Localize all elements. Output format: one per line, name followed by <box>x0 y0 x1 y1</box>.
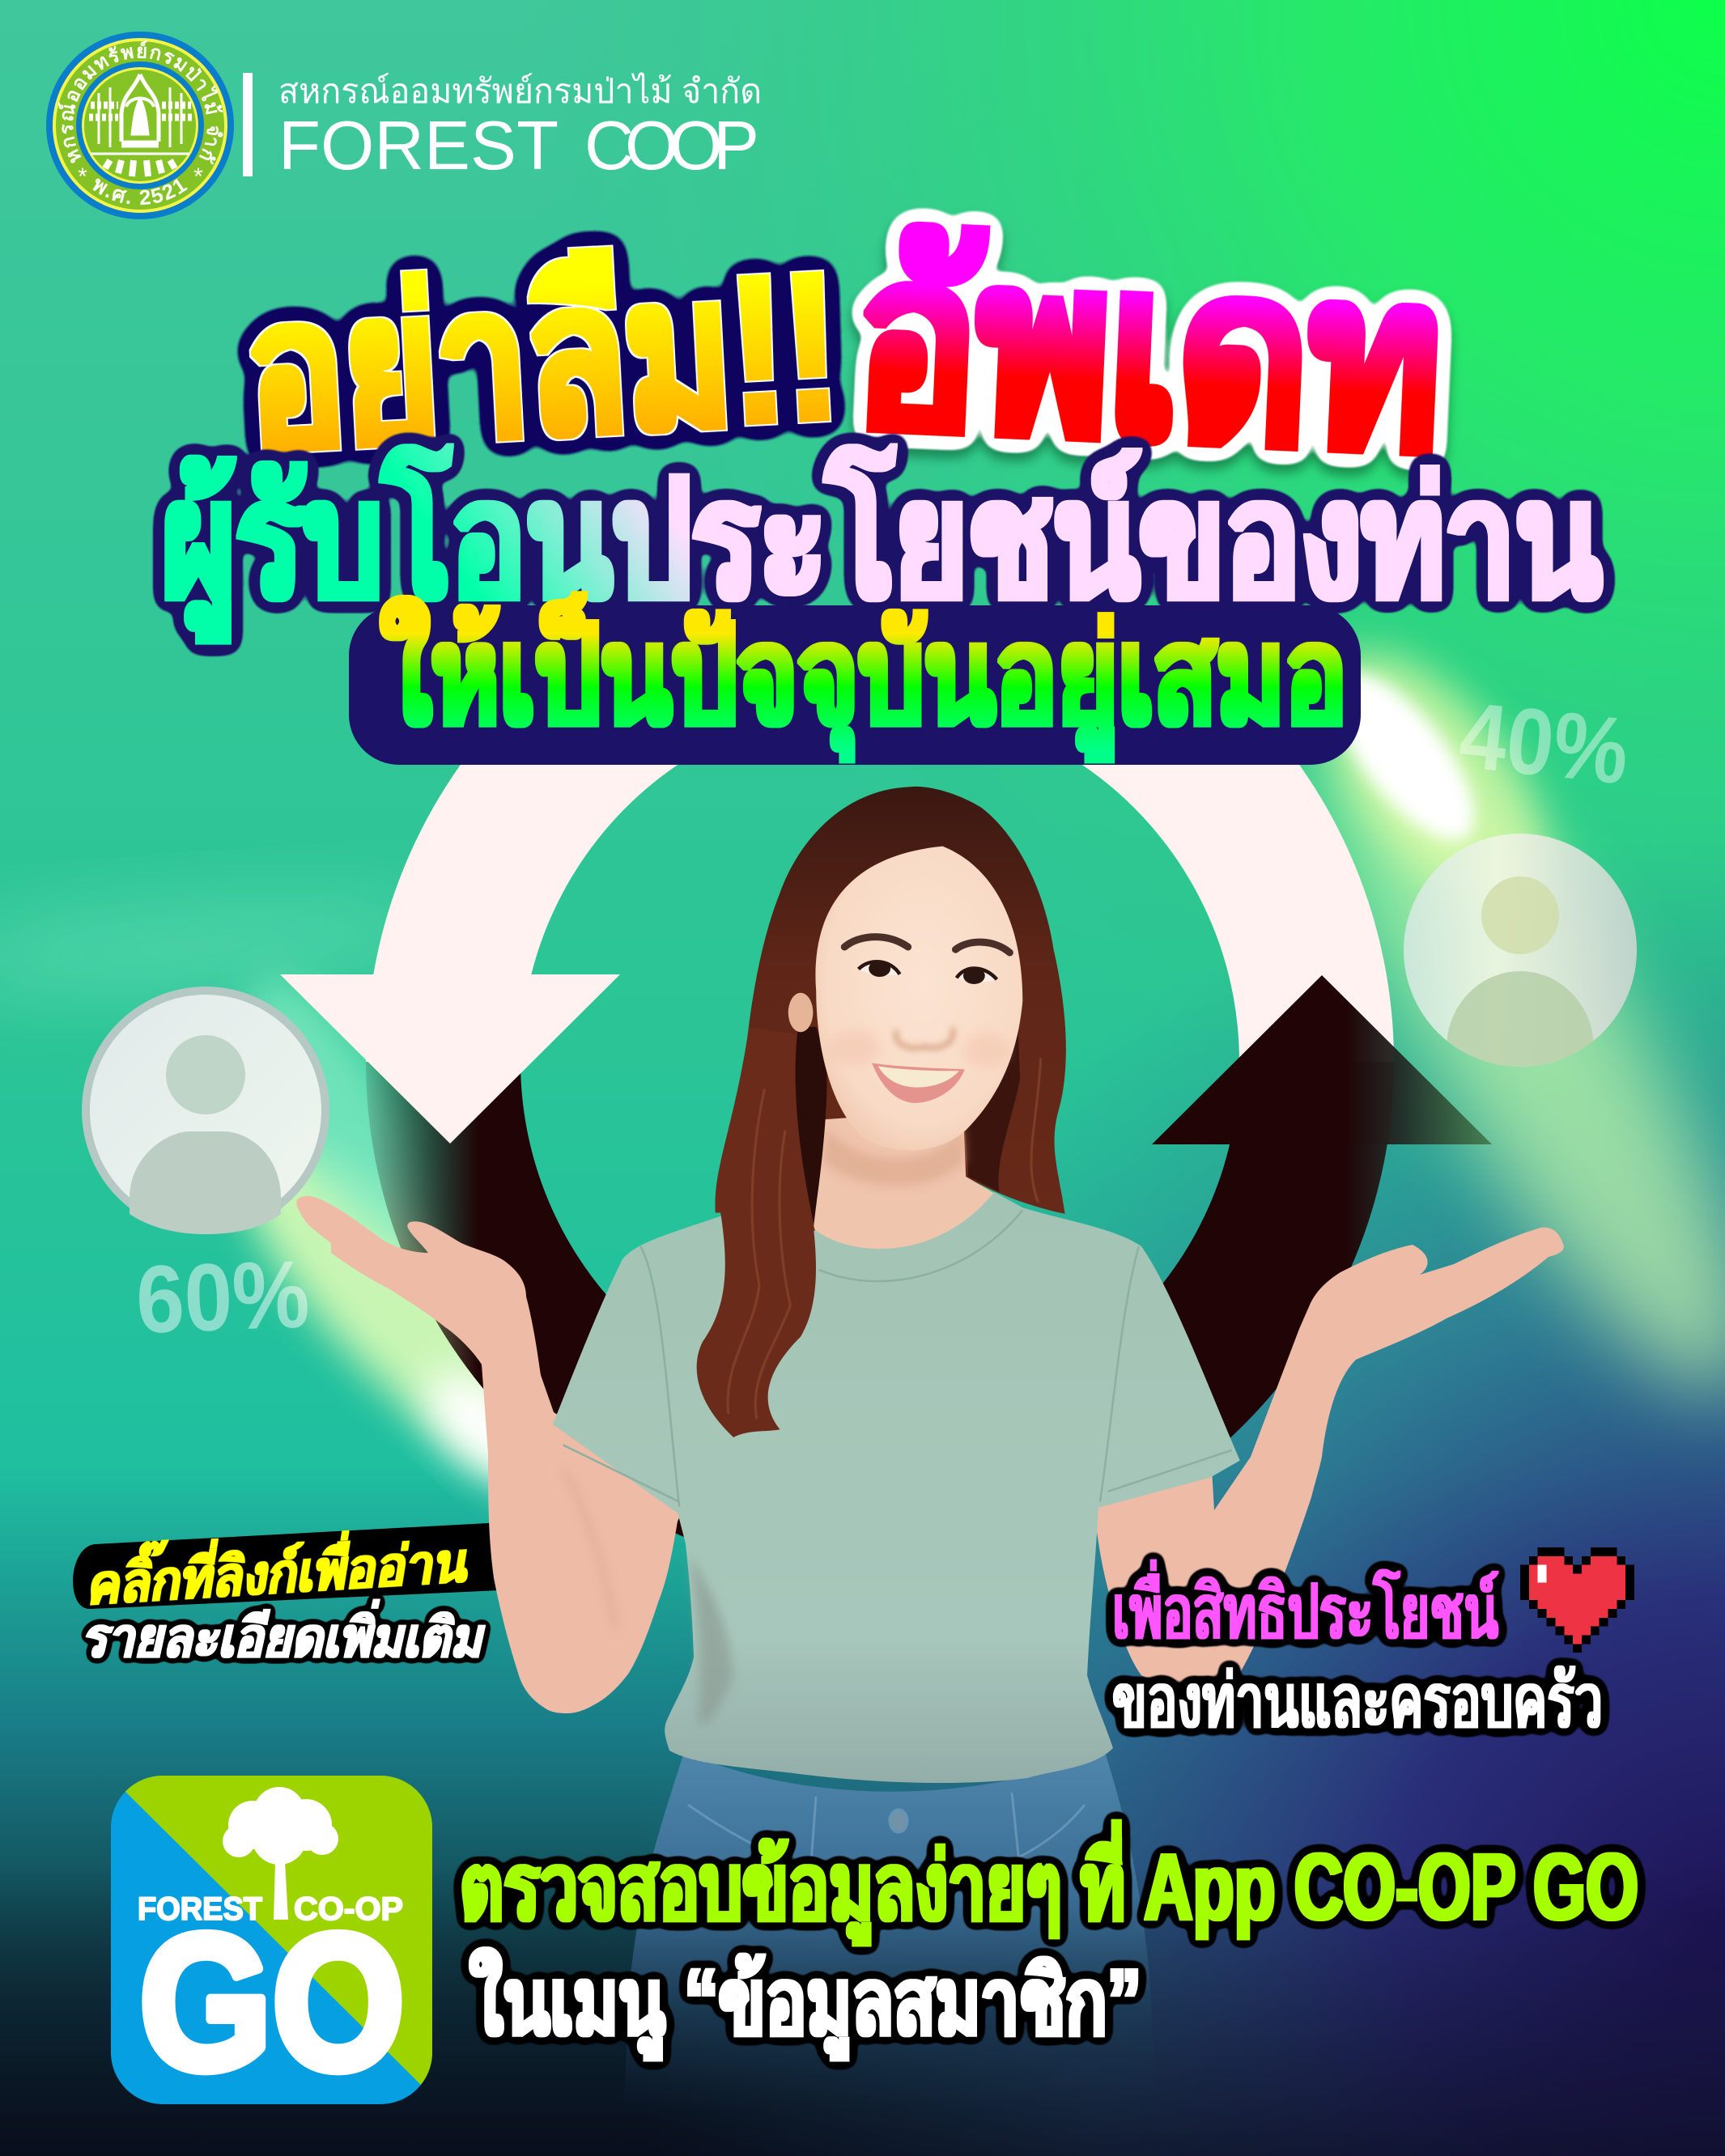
icon label go: GO <box>139 1895 405 2110</box>
avatar left <box>82 987 329 1234</box>
face <box>815 847 1022 1150</box>
arrowhead down <box>280 974 620 1144</box>
light beams <box>0 615 1725 1516</box>
dark lower half of ring <box>366 1062 1394 1576</box>
jeans <box>623 1752 1158 2112</box>
person <box>296 787 1564 2112</box>
front hair lock <box>697 1027 823 1437</box>
pale upper half of ring <box>366 765 1394 1062</box>
logo: * <box>78 163 87 190</box>
ear <box>788 993 813 1032</box>
icon label forest: FOREST <box>138 1891 262 1927</box>
hair strands <box>728 1058 1041 1420</box>
shirt waist shading <box>690 1553 733 1725</box>
organisation name: สหกรณ์ออมทรัพย์กรมป่าไม้ จำกัด <box>278 72 762 110</box>
right arm and hand <box>1093 1228 1564 1684</box>
call to action line 2: ในเมนู “ข้อมูลสมาชิก” <box>469 1947 1141 2061</box>
avatar right <box>1404 834 1637 1067</box>
forest coop wordmark: COOP <box>584 108 759 185</box>
percent 40: 40% <box>1455 682 1634 804</box>
nose <box>896 1029 954 1048</box>
mouth <box>872 1063 965 1103</box>
icon: pixel heart <box>1520 1547 1634 1653</box>
headline pill <box>349 605 1361 765</box>
temple emblem <box>89 74 193 176</box>
circular arrows <box>280 765 1492 1537</box>
arrowhead up <box>1152 975 1492 1144</box>
forest coop wordmark: FOREST <box>278 108 559 185</box>
icon label coop: CO-OP <box>294 1891 403 1927</box>
headline: update: อัพเดท <box>851 198 1447 505</box>
side note: click link: คลิ๊กที่ลิงก์เพื่ออ่าน <box>83 1522 469 1616</box>
hair shadow <box>796 1027 827 1223</box>
cheeks <box>829 1029 1009 1068</box>
left arm and hand <box>296 1196 688 1713</box>
headline: remember: อย่าลืม!! <box>241 227 843 494</box>
logo divider <box>243 73 253 176</box>
app icon <box>109 1776 432 2110</box>
icon: tree <box>223 1787 338 1920</box>
side note pill <box>73 1522 518 1609</box>
neck shadow <box>822 1125 965 1186</box>
logo: * <box>193 163 203 190</box>
eyes <box>858 961 996 984</box>
headline: always current: ให้เป็นปัจจุบันอยู่เสมอ <box>380 592 1347 762</box>
logo <box>46 32 234 219</box>
t-shirt collar and sleeve seams <box>563 1210 1232 1507</box>
jeans waistband details <box>688 1793 1085 1886</box>
neck <box>811 1110 994 1250</box>
percent 60: 60% <box>134 1241 311 1354</box>
hair shadow right of neck <box>963 1016 1020 1192</box>
side note: more details: รายละเอียดเพิ่มเติม <box>81 1599 486 1669</box>
logo: พ.ศ. 2521 <box>92 178 188 206</box>
t-shirt <box>553 1192 1240 1783</box>
forest coop wordmark <box>278 108 759 185</box>
eyebrows <box>844 937 1009 953</box>
side note: benefits: เพื่อสิทธิประโยชน์ <box>1112 1560 1498 1654</box>
back hair <box>697 787 1066 1437</box>
